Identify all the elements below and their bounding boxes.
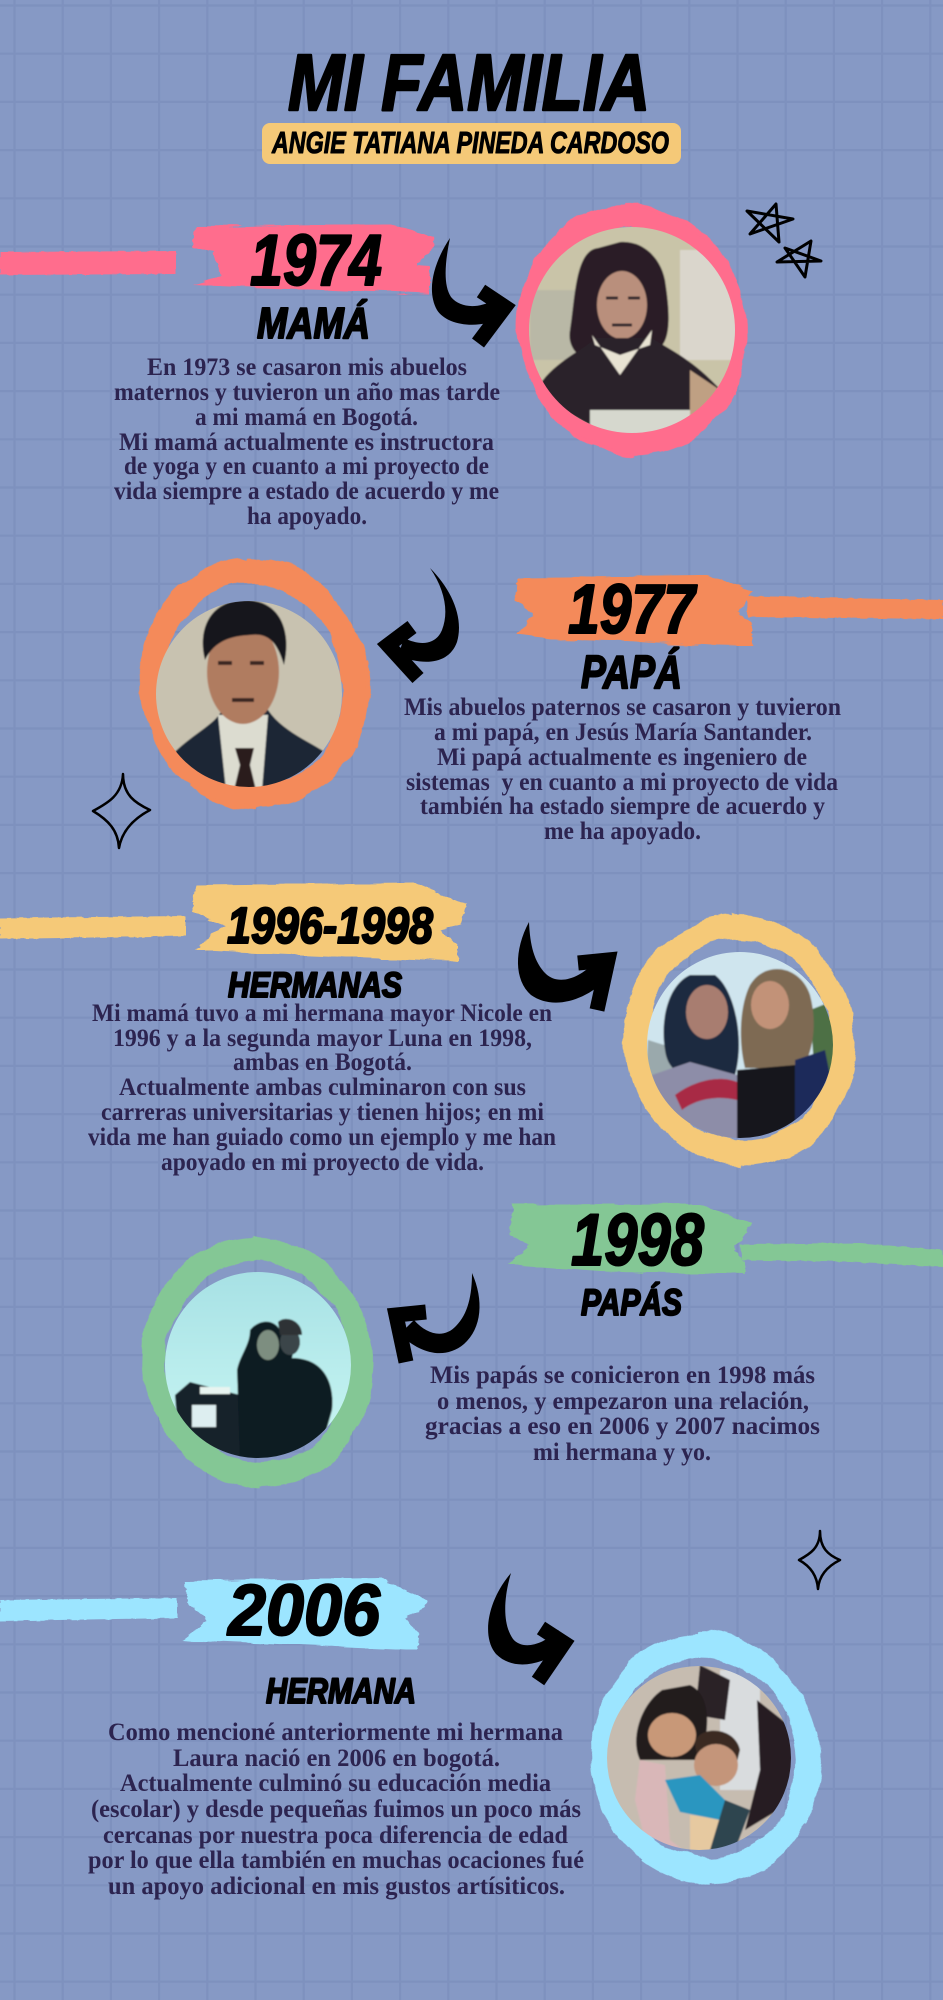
photo ring: [603, 894, 877, 1186]
body text: ambas en Bogotá.: [233, 1049, 412, 1076]
body text: gracias a eso en 2006 y 2007 nacimos: [425, 1413, 820, 1440]
body text: vida siempre a estado de acuerdo y me: [114, 478, 499, 505]
arrow: [488, 1573, 570, 1681]
photo: mamá: [529, 227, 735, 433]
subtitle pill: ANGIE TATIANA PINEDA CARDOSO: [271, 125, 669, 160]
body text: Mi mamá tuvo a mi hermana mayor Nicole en: [92, 1000, 552, 1027]
body text: Como mencioné anteriormente mi hermana: [108, 1719, 563, 1746]
photo: hermana: [607, 1666, 791, 1850]
body text: 1996 y a la segunda mayor Luna en 1998,: [113, 1025, 532, 1052]
year 1977: 1977: [568, 570, 697, 648]
body text: Laura nació en 2006 en bogotá.: [173, 1745, 500, 1772]
body text: a mi papá, en Jesús María Santander.: [434, 719, 812, 746]
body text: [425, 1362, 820, 1466]
panel: 1996-1998 hermanas: [0, 882, 877, 1186]
heading papá: PAPÁ: [581, 646, 682, 698]
brush band 1977: [516, 575, 943, 646]
body text: me ha apoyado.: [544, 818, 701, 845]
decorative stars top right: [747, 204, 821, 277]
body text: también ha estado siempre de acuerdo y: [420, 793, 825, 820]
year 1974: 1974: [250, 221, 382, 301]
decorative star: [93, 774, 150, 848]
heading hermanas: HERMANAS: [228, 966, 402, 1005]
body text: Mi papá actualmente es ingeniero de: [437, 744, 807, 771]
heading hermana: HERMANA: [266, 1672, 416, 1711]
arrow: [518, 922, 608, 1010]
decorative star bottom right: [799, 1531, 840, 1589]
brush band 2006: [0, 1578, 427, 1650]
body text: Actualmente ambas culminaron con sus: [119, 1074, 526, 1101]
header: [262, 38, 681, 164]
body text: [114, 354, 500, 530]
body text: Mis abuelos paternos se casaron y tuvieron: [404, 694, 841, 721]
year 1996-1998: 1996-1998: [227, 897, 434, 954]
body text: de yoga y en cuanto a mi proyecto de: [124, 453, 489, 480]
body text: cercanas por nuestra poca diferencia de edad: [103, 1822, 568, 1849]
subtitle pill: [262, 123, 681, 164]
photo ring: [117, 538, 391, 830]
body text: maternos y tuvieron un año mas tarde: [114, 379, 500, 406]
body text: En 1973 se casaron mis abuelos: [147, 354, 467, 381]
photo: papás: [165, 1272, 351, 1458]
body text: apoyado en mi proyecto de vida.: [161, 1149, 484, 1176]
body text: vida me han guiado como un ejemplo y me han: [88, 1124, 556, 1151]
arrow: [396, 1273, 480, 1362]
brush band 1996-1998: [0, 882, 466, 962]
body text: [404, 694, 841, 845]
body text: un apoyo adicional en mis gustos artísiticos.: [108, 1873, 565, 1900]
body text: [88, 1000, 556, 1176]
photo ring: [568, 1612, 842, 1904]
arrow: [432, 238, 505, 343]
photo ring: [495, 184, 769, 476]
body text: por lo que ella también en muchas ocaciones fué: [88, 1847, 584, 1874]
body text: (escolar) y desde pequeñas fuimos un poco más: [91, 1796, 581, 1823]
heading papás: PAPÁS: [581, 1282, 682, 1323]
body text: sistemas y en cuanto a mi proyecto de vida: [406, 769, 838, 796]
body text: carreras universitarias y tienen hijos; en mi: [101, 1099, 544, 1126]
heading mamá: MAMÁ: [257, 298, 370, 348]
body text: a mi mamá en Bogotá.: [195, 404, 418, 431]
year 2006: 2006: [226, 1571, 381, 1651]
panel: 2006 hermana: [0, 1571, 842, 1904]
body text: [88, 1719, 584, 1900]
arrow: [388, 568, 459, 678]
panel: 1998 papás: [121, 1200, 943, 1508]
brush band 1974: [0, 224, 434, 294]
title: MI FAMILIA: [288, 38, 650, 127]
body text: mi hermana y yo.: [533, 1439, 711, 1466]
panel: 1977 papá: [93, 538, 943, 848]
photo ring: [121, 1216, 395, 1508]
year 1998: 1998: [571, 1200, 704, 1281]
body text: ha apoyado.: [247, 503, 367, 530]
photo: papá: [156, 601, 342, 787]
brush band 1998: [508, 1204, 943, 1275]
body text: Mi mamá actualmente es instructora: [119, 429, 494, 456]
body text: o menos, y empezaron una relación,: [437, 1388, 809, 1415]
body text: Mis papás se conicieron en 1998 más: [430, 1362, 815, 1389]
photo: hermanas: [647, 952, 833, 1138]
panel: 1974 mamá: [0, 184, 769, 530]
body text: Actualmente culminó su educación media: [120, 1770, 551, 1797]
